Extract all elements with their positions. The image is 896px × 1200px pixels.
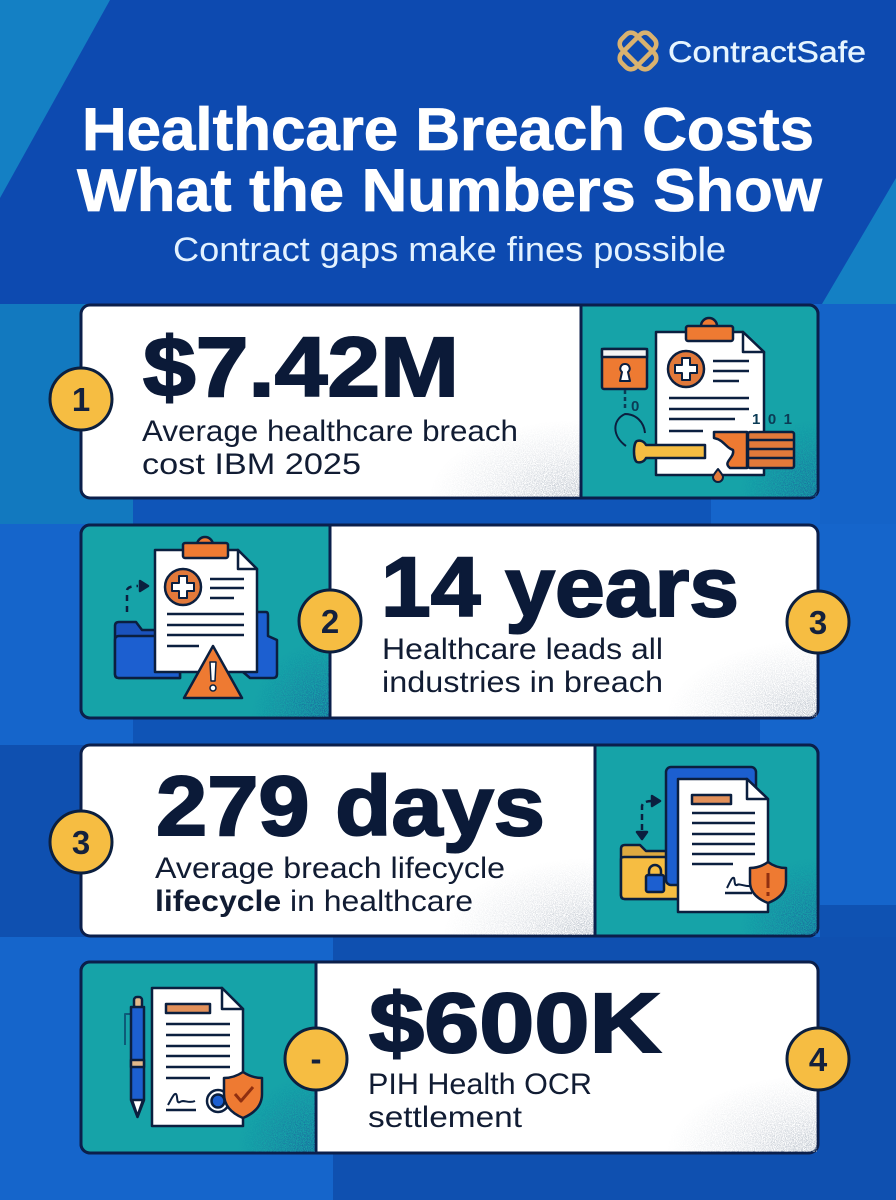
badge dash: -	[310, 1040, 322, 1077]
stat description	[155, 852, 505, 918]
title: Healthcare Breach Costs	[82, 96, 814, 163]
title	[77, 96, 822, 224]
icon: locked folder and document	[621, 767, 786, 912]
stat description: settlement	[368, 1101, 523, 1134]
logo	[617, 30, 866, 72]
stat value: $600K	[369, 976, 661, 1070]
stat description: PIH Health OCR	[368, 1068, 592, 1101]
subtitle: Contract gaps make fines possible	[173, 231, 726, 269]
badge 1	[50, 368, 112, 430]
stat description: Average breach lifecycle	[155, 852, 505, 885]
title: What the Numbers Show	[77, 157, 822, 224]
icon: breached medical record	[602, 318, 794, 482]
stat value: 14 years	[381, 540, 739, 634]
badge 2	[299, 590, 361, 652]
stat value: $7.42M	[143, 320, 459, 414]
binary digits: 0	[631, 398, 639, 415]
binary digits: 1 0 1	[752, 411, 792, 428]
panel: stat 2	[81, 525, 818, 718]
badge 1: 1	[72, 381, 90, 418]
stat description	[368, 1068, 592, 1134]
stat description: cost IBM 2025	[142, 448, 361, 481]
badge 3 left: 3	[72, 824, 90, 861]
badge 3 right	[787, 591, 849, 653]
stat value: 279 days	[156, 759, 545, 853]
stat description: Average healthcare breach	[142, 415, 518, 448]
panel: stat 3	[81, 745, 818, 936]
logo wordmark: ContractSafe	[668, 36, 866, 69]
binary digits	[631, 398, 792, 428]
badge dash	[285, 1028, 347, 1090]
badge 2: 2	[321, 603, 339, 640]
icon: logo knot	[617, 30, 659, 72]
stat description	[382, 633, 663, 699]
panel: stat 4	[81, 962, 818, 1153]
icon: record with warning	[115, 537, 277, 698]
badge 3 left	[50, 811, 112, 873]
badge 4: 4	[809, 1041, 828, 1078]
badge 3 right: 3	[809, 604, 827, 641]
stat description: Healthcare leads all	[382, 633, 663, 666]
icon: signed contract and pen	[125, 988, 262, 1126]
panel: stat 1	[81, 305, 818, 498]
stat description	[142, 415, 518, 481]
badge 4	[787, 1028, 849, 1090]
stat description: lifecycle in healthcare	[155, 885, 473, 918]
stat description: industries in breach	[382, 666, 663, 699]
